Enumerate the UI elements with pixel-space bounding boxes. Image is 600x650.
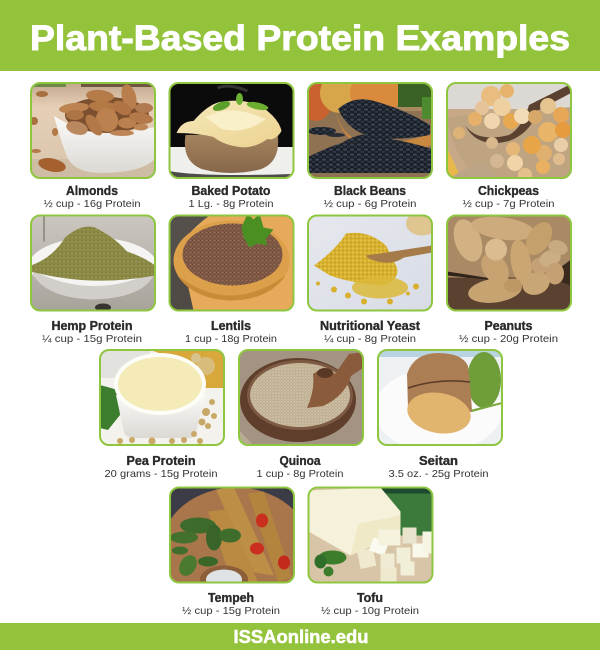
- photo: yeast flakes with spoon: [308, 212, 438, 310]
- serving and protein: ¼ cup - 15g Protein: [42, 333, 142, 345]
- card: Nutritional Yeast: [308, 212, 438, 345]
- photo: baked potato: [170, 83, 294, 178]
- card: Hemp Protein: [29, 216, 157, 345]
- card: Tempeh: [169, 486, 295, 616]
- card: Tofu: [308, 488, 432, 617]
- serving and protein: ½ cup - 15g Protein: [182, 605, 280, 617]
- name: Pea Protein: [126, 454, 196, 468]
- name: Hemp Protein: [52, 319, 132, 333]
- name: Tempeh: [208, 591, 254, 605]
- serving and protein: 1 Lg. - 8g Protein: [188, 198, 274, 210]
- photo: chickpeas in sack with spoon: [447, 83, 571, 182]
- serving and protein: ½ cup - 7g Protein: [462, 198, 555, 210]
- card: Pea Protein: [100, 350, 224, 480]
- serving and protein: ½ cup - 20g Protein: [459, 333, 558, 345]
- name: Almonds: [66, 184, 118, 198]
- name: Seitan: [419, 454, 458, 468]
- photo: black beans on wood: [307, 82, 433, 179]
- card: Baked Potato: [170, 83, 294, 210]
- card: Black Beans: [307, 82, 433, 209]
- photo: hemp powder in bowl: [29, 216, 157, 312]
- name: Nutritional Yeast: [320, 319, 421, 333]
- footer banner: [0, 623, 600, 650]
- serving and protein: ½ cup - 10g Protein: [321, 605, 419, 617]
- photo: pea protein in white bowl: [100, 350, 224, 445]
- card: Almonds: [30, 83, 155, 210]
- serving and protein: 3.5 oz. - 25g Protein: [388, 468, 489, 480]
- card: Quinoa: [239, 350, 363, 480]
- card: Peanuts: [447, 213, 571, 345]
- photo: lentils in wooden bowl: [170, 214, 294, 310]
- card: Chickpeas: [447, 83, 571, 210]
- name: Tofu: [357, 591, 383, 605]
- photo: almonds in white bowl: [30, 83, 155, 178]
- name: Quinoa: [280, 454, 321, 468]
- title banner: [0, 0, 600, 71]
- card: Seitan: [374, 350, 502, 480]
- serving and protein: 20 grams - 15g Protein: [104, 468, 218, 480]
- website: ISSAonline.edu: [234, 627, 368, 647]
- photo: peanuts on burlap: [447, 213, 571, 310]
- name: Black Beans: [334, 184, 406, 198]
- serving and protein: ½ cup - 6g Protein: [324, 198, 417, 210]
- serving and protein: 1 cup - 18g Protein: [185, 333, 277, 345]
- name: Chickpeas: [478, 184, 539, 198]
- serving and protein: 1 cup - 8g Protein: [256, 468, 344, 480]
- card: Lentils: [170, 214, 294, 345]
- name: Lentils: [211, 319, 251, 333]
- photo: tempeh strips with basil: [169, 486, 295, 584]
- name: Peanuts: [484, 319, 533, 333]
- title: Plant-Based Protein Examples: [30, 19, 570, 58]
- photo: quinoa in wooden bowl: [239, 350, 363, 445]
- photo: sliced seitan roast on plate: [374, 350, 502, 452]
- serving and protein: ¼ cup - 8g Protein: [324, 333, 416, 345]
- photo: tofu block and cubes: [308, 488, 432, 582]
- name: Baked Potato: [192, 184, 271, 198]
- serving and protein: ½ cup - 16g Protein: [44, 198, 141, 210]
